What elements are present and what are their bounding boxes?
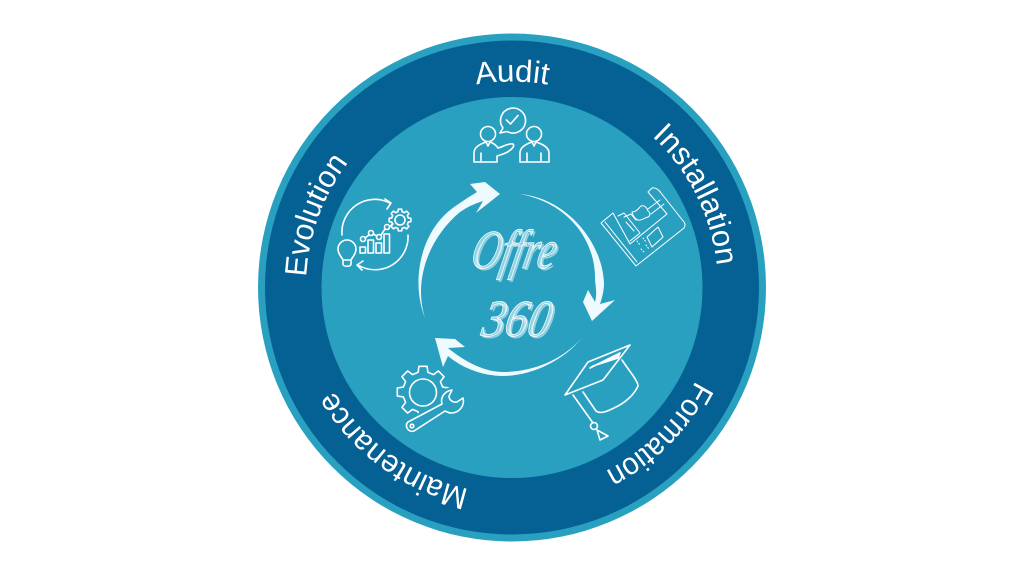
title line layer: Offre — [466, 220, 563, 281]
icon: installation, CNC machine — [601, 188, 685, 266]
title shadow layer — [468, 222, 565, 350]
central title: Offre 360 — [466, 220, 565, 350]
icon: maintenance, gear and wrench — [397, 366, 463, 431]
dark ring band — [265, 40, 759, 534]
cycle arrows — [418, 182, 615, 376]
title shadow layer: Offre — [468, 222, 565, 283]
outer ring border — [258, 34, 766, 542]
icon: audit, two people and speech bubble — [474, 108, 549, 162]
ring label: Evolution: Evolution — [285, 156, 348, 274]
arrow: towards installation — [520, 194, 615, 321]
icon: formation, graduation cap — [565, 345, 638, 440]
icon: evolution, chart, gear and bulb in a cycle — [338, 199, 411, 270]
inner disc — [322, 97, 702, 478]
title line layer: 360 — [477, 291, 558, 348]
ring label: Audit: Audit — [476, 60, 550, 84]
title shadow layer: 360 — [479, 293, 560, 350]
arrow: towards maintenance — [435, 338, 582, 376]
ring label: Formation: Formation — [607, 382, 714, 484]
ring label: Installation: Installation — [654, 122, 733, 264]
arrow: towards audit — [418, 182, 500, 318]
title line layer — [466, 220, 563, 348]
ring label: Maintenance: Maintenance — [322, 394, 466, 510]
